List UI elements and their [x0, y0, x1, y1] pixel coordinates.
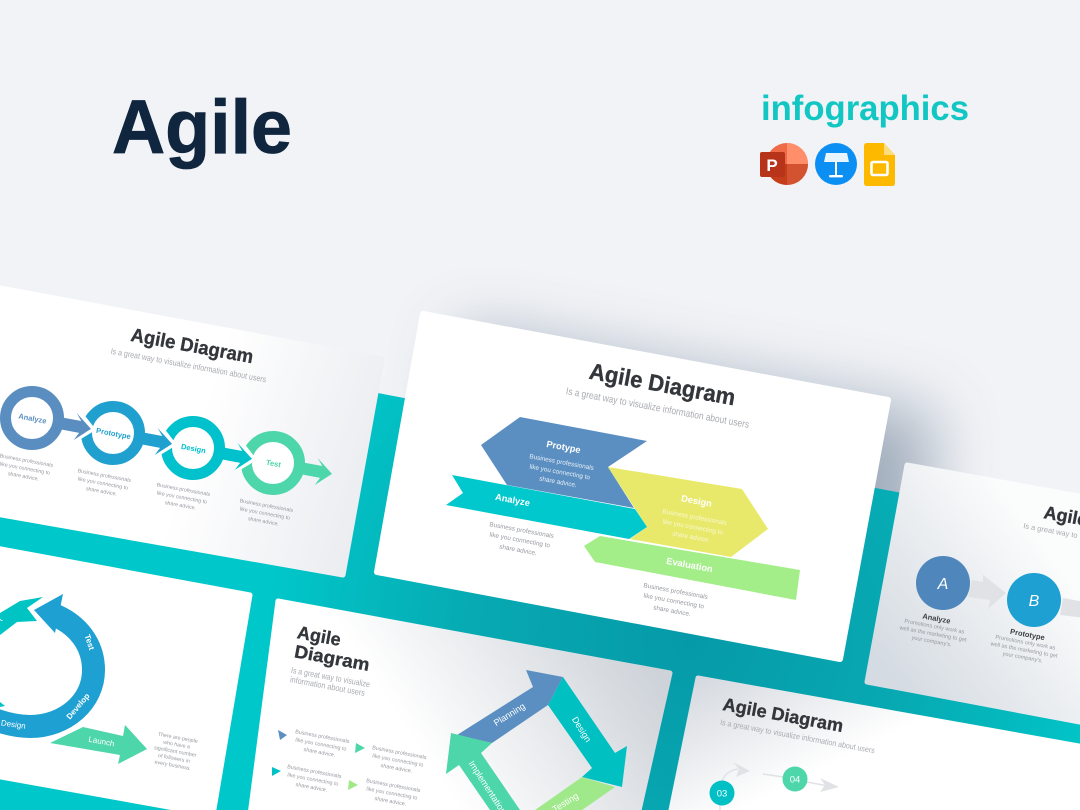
label: Design: Design [180, 442, 207, 455]
arrow: Analyze to Prototype [57, 407, 99, 447]
step 04: 04 [790, 774, 800, 786]
body text: Launch: There are people [157, 732, 198, 745]
ring: Test [246, 436, 300, 490]
body text: A: Business professionals [295, 729, 350, 745]
label: Analyze: Analyze [494, 492, 531, 508]
label: Protype: Protype [546, 439, 581, 455]
icon: Keynote [815, 143, 857, 185]
body text: D: Business professionals [366, 778, 421, 794]
body text: Protype [525, 453, 594, 492]
body text: Prototype: Promotions only work as [995, 635, 1056, 652]
body text: column 2: Business professionals [77, 468, 132, 484]
label: Prototype: Prototype [95, 426, 131, 441]
icon: PowerPoint: P [766, 156, 778, 175]
slide title: Agile Diagram [587, 358, 738, 410]
body text: column 4: Business professionals [239, 498, 294, 514]
step B: B [1029, 593, 1040, 610]
cycle arc: teal [0, 597, 43, 707]
arrow: Implementation [446, 733, 520, 810]
shape: Evaluation [584, 536, 800, 600]
body text: column 4: share advice. [247, 516, 279, 528]
body text: Protype: share advice. [539, 475, 577, 489]
body text: column 2 [74, 468, 132, 500]
label: Test: Test [265, 458, 282, 469]
body text: D: share advice. [374, 796, 407, 808]
slide subtitle: Is a great way to visualize [290, 665, 371, 689]
body text: B: share advice. [380, 763, 413, 775]
arrow: B out [1060, 598, 1080, 618]
bullet: teal [272, 767, 281, 776]
body text: C: like you connecting to [287, 772, 339, 788]
body text: A [292, 729, 350, 761]
shape: Analyze [446, 475, 647, 539]
body text: B: like you connecting to [372, 753, 424, 769]
label: Launch: Launch [88, 735, 115, 748]
slide title: Agile [296, 622, 343, 650]
arrow: Planning [457, 670, 563, 743]
body text: A: like you connecting to [295, 737, 347, 753]
slide title: Diagram [293, 641, 371, 675]
arrow: Test out [299, 456, 334, 488]
ring: Design [166, 422, 220, 474]
slide title: Agile Diagram [721, 694, 845, 736]
body text: Design: share advice. [672, 530, 710, 544]
teal backdrop band [0, 393, 1080, 810]
body text: A: share advice. [303, 747, 336, 759]
body text: Analyze: Promotions only work as [904, 619, 965, 636]
body text: D: like you connecting to [366, 786, 418, 802]
body text: column 3: Business professionals [156, 482, 211, 498]
body text: Launch: of followers in [157, 753, 190, 765]
body text: Design [658, 508, 727, 547]
body text: C: share advice. [295, 782, 328, 794]
body text: Analyze: your company's. [911, 635, 952, 649]
body text: column 2: like you connecting to [77, 476, 128, 492]
step A: A [937, 576, 948, 593]
connector arrow: 04 out [763, 774, 839, 792]
bullet: mint [355, 743, 365, 753]
bullet: blue [278, 730, 287, 740]
heading: infographics: infographics [761, 89, 969, 128]
body text: Prototype: well as the marketing to get [989, 641, 1058, 660]
step 04 [782, 766, 808, 792]
arrow: Prototype to Design [138, 422, 180, 462]
body text: Prototype: your company's. [1002, 651, 1043, 665]
label: Design: Design [570, 715, 593, 744]
body text: Design: Business professionals [662, 508, 727, 527]
label: Evaluation: Evaluation [666, 556, 714, 574]
body text: B [369, 745, 427, 777]
label: Prototype: Prototype [1009, 627, 1045, 642]
label: Planning: Planning [492, 701, 527, 728]
panel: center slide [377, 314, 888, 659]
body text: Prototype [988, 634, 1060, 667]
body text: C [284, 764, 342, 796]
body text: column 1 [0, 453, 54, 485]
body text: Evaluation: Business professionals [643, 582, 708, 601]
body text: Analyze: like you connecting to [489, 531, 551, 550]
step A [916, 556, 970, 610]
arrow: A to B [968, 575, 1006, 609]
label: Analyze: Analyze [922, 612, 951, 626]
center card shadow [440, 330, 935, 650]
label: Test: Test [83, 633, 96, 651]
icon: Google Slides [864, 143, 895, 186]
body text: column 3: share advice. [164, 500, 196, 512]
label: Develop: Develop [65, 691, 92, 721]
shape: Protype [481, 417, 647, 508]
body text: Analyze: well as the marketing to get [898, 625, 967, 644]
body text: Analyze: Business professionals [489, 521, 554, 540]
body text: Evaluation: like you connecting to [643, 592, 705, 611]
body text: Evaluation [639, 582, 708, 621]
body text: column 1: like you connecting to [0, 461, 50, 477]
body text: Launch [151, 731, 200, 773]
ring: Analyze [6, 392, 58, 444]
panel: cycle slide [0, 547, 250, 810]
body text: Launch: significant number [153, 745, 197, 759]
bullet: light green [348, 780, 358, 790]
body text: column 3 [153, 482, 211, 514]
icon: PowerPoint [760, 143, 808, 185]
step 03 [710, 780, 734, 810]
body text: Launch: who have a [163, 740, 190, 751]
body text: column 4: like you connecting to [239, 506, 290, 522]
slide subtitle: Is a great way to visualize information about users [110, 346, 267, 384]
panel: roadmap slide [670, 678, 1080, 810]
shape: Design [608, 467, 768, 557]
body text: Analyze: share advice. [499, 543, 537, 557]
slide title [293, 622, 371, 675]
body text: Protype: Business professionals [529, 453, 594, 472]
body text: Design: like you connecting to [662, 518, 724, 537]
slide subtitle: information about users [289, 674, 366, 698]
body text: C: Business professionals [287, 764, 342, 780]
body text: D [363, 778, 421, 810]
ring: Prototype [86, 406, 140, 460]
body text: Analyze [897, 618, 969, 651]
arrow: Testing [528, 777, 615, 810]
slide subtitle: Is a great way to visualize information about users [719, 718, 875, 755]
arrow: Launch [50, 725, 147, 764]
label: Analyze: Analyze [18, 412, 47, 426]
panel: circular process slide [0, 286, 382, 575]
step 03: 03 [717, 788, 727, 800]
arrow: Design to Test [218, 437, 260, 477]
cycle arc: blue arrow [0, 594, 94, 726]
body text: column 1: share advice. [7, 471, 39, 483]
label: Design: Design [0, 718, 26, 731]
panel: A B steps slide [867, 465, 1080, 724]
body text: Protype: like you connecting to [529, 463, 591, 482]
body text: column 1: Business professionals [0, 453, 54, 469]
body text: Launch: every business. [154, 759, 191, 772]
body text: Analyze [485, 521, 554, 560]
body text: column 2: share advice. [85, 486, 117, 498]
body text: column 4 [236, 498, 294, 530]
step B [1007, 573, 1061, 627]
connector arrow: 03 to 04 [722, 762, 750, 782]
body text: column 3: like you connecting to [156, 490, 207, 506]
body text: Evaluation: share advice. [653, 604, 691, 618]
slide title: Agile Diagram [129, 325, 255, 368]
label: Design: Design [680, 493, 713, 509]
arrow: Design [548, 677, 627, 787]
slide subtitle: Is a great way to visualize information about users [565, 386, 750, 431]
panel: square loop slide [250, 601, 670, 810]
title: Agile: Agile [112, 85, 292, 170]
body text: B: Business professionals [372, 745, 427, 761]
